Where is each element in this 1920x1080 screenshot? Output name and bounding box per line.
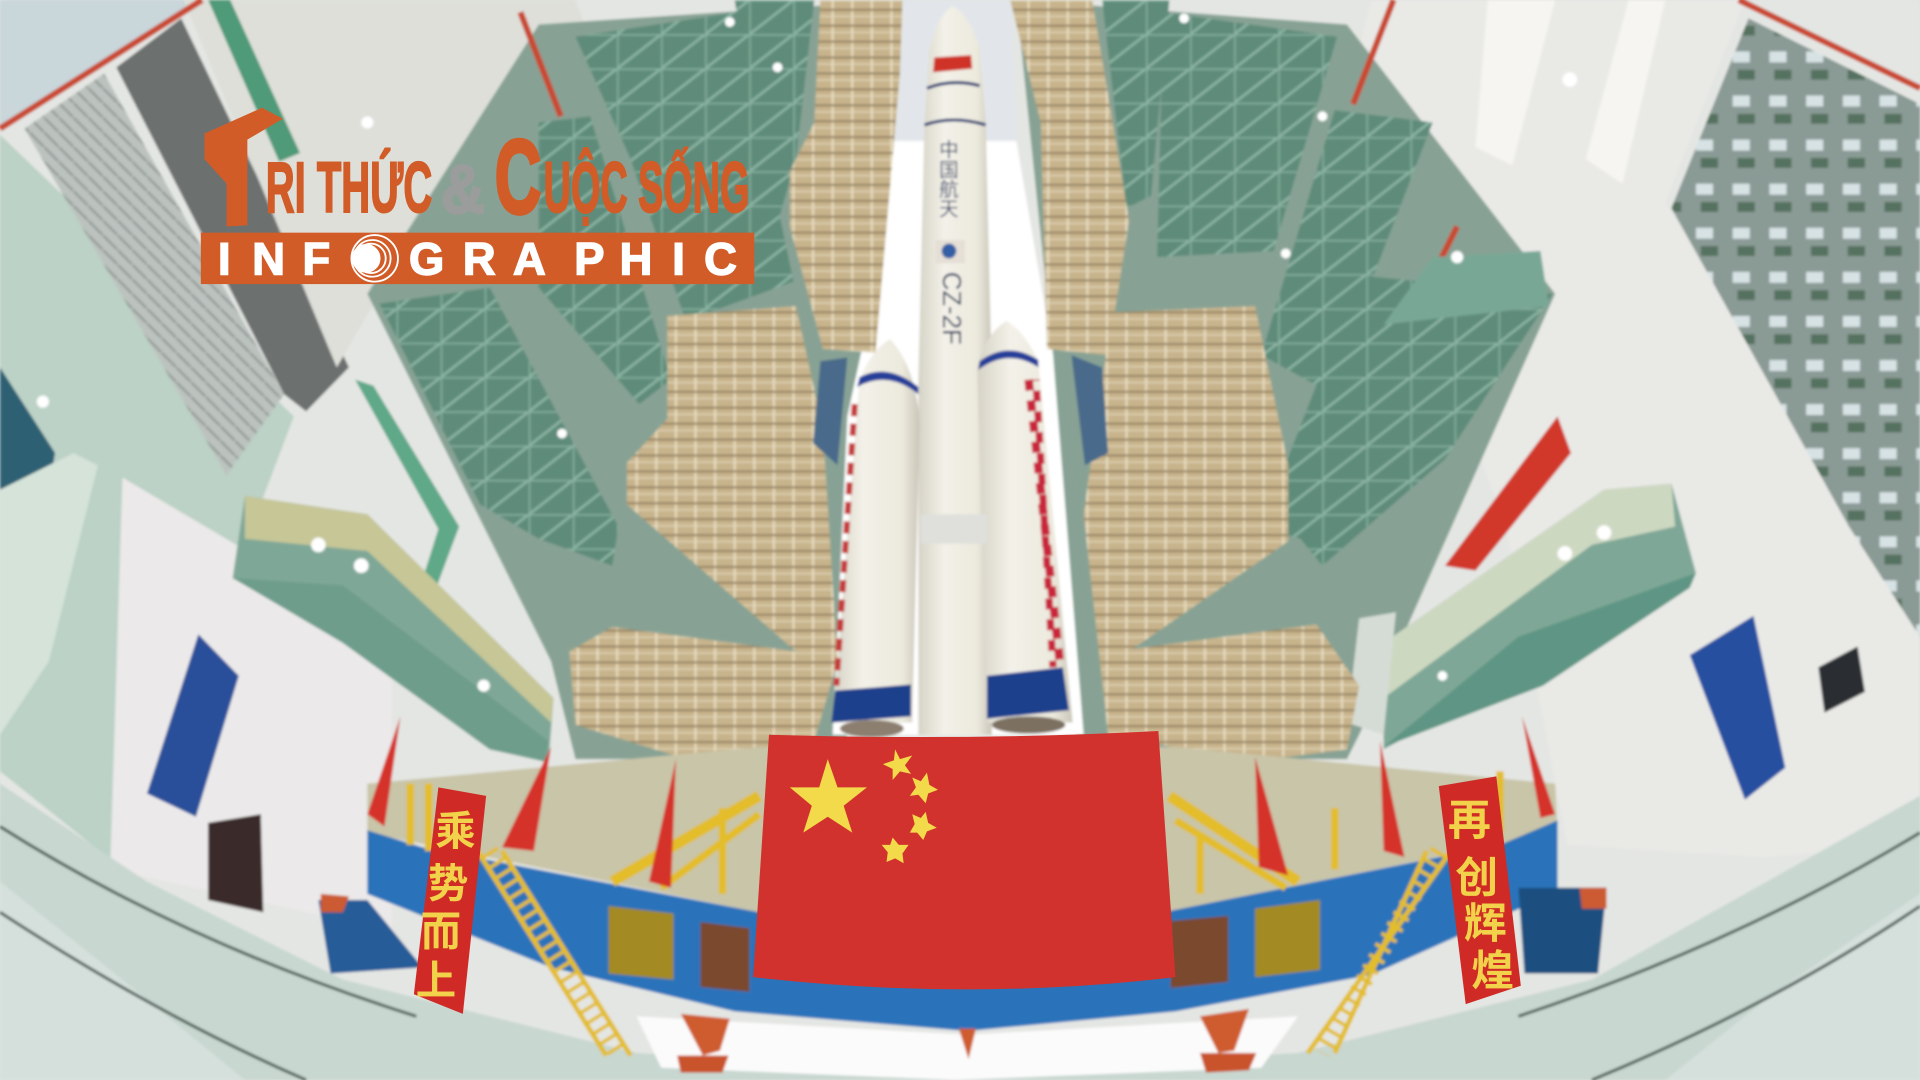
national flag (753, 731, 1176, 989)
top of hall behind rocket (879, 0, 1016, 141)
doorway (208, 814, 263, 912)
core lettering: 天 (939, 199, 959, 221)
yellow stairs and railings (410, 771, 1500, 1056)
blue shadow strips beside rocket (813, 355, 1108, 465)
dark wall screen (1818, 647, 1865, 713)
left booster (833, 339, 920, 722)
green gantry left (233, 0, 814, 762)
slogan banner right: 创 (1455, 855, 1498, 903)
infographic wordmark: INFGRAPHIC (218, 233, 737, 284)
slogan banner left: 上 (416, 957, 456, 1003)
core seam band (921, 514, 987, 544)
logo big C: C (495, 119, 541, 236)
booster blue bands (857, 372, 918, 394)
wall poster left (147, 634, 239, 817)
rocket (831, 6, 1073, 737)
platform bay windows (609, 906, 673, 980)
CZ-2F label: CZ-2F (937, 272, 965, 345)
slogan banner left (414, 787, 486, 1014)
infographic O icon (351, 235, 398, 282)
logo text: uộc sống: UỘC SỐNG (544, 148, 749, 228)
tan work platforms left (569, 0, 902, 774)
support feet (681, 1014, 730, 1056)
wall poster right (1690, 616, 1785, 800)
red payload marking (933, 55, 972, 72)
slogan banner right (1439, 776, 1521, 1004)
logo ampersand: & (441, 151, 485, 228)
central light opening (833, 141, 1084, 735)
green gantry right (1102, 0, 1696, 749)
slogan banner right: 煌 (1471, 948, 1514, 996)
logo: Tri thức & Cuộc sống Infographic (201, 108, 754, 284)
engine nozzles (840, 720, 904, 737)
small red flags (367, 716, 1555, 888)
flag stars (790, 749, 938, 863)
bright floor under platform (637, 1016, 1298, 1080)
decorative red trim lines (0, 0, 1920, 416)
core lettering: 国 (939, 159, 959, 181)
booster red checks (836, 404, 855, 686)
space logo (936, 240, 965, 263)
core dark bands (924, 83, 986, 125)
gantry underlay right (1016, 0, 1555, 759)
slogan banner left: 乘 (435, 808, 476, 854)
tan work platforms right (1010, 0, 1359, 762)
railing deck behind platform (367, 747, 1558, 912)
core lettering: 航 (939, 179, 959, 201)
slogan banner left: 而 (421, 908, 461, 954)
mobile launch platform blue base (318, 820, 1607, 1073)
infographic bar (201, 233, 754, 284)
logo text: ri thức: RI THỨC (266, 149, 432, 228)
logo big T (204, 108, 283, 227)
slogan banner left: 势 (428, 861, 468, 907)
red wall banner right (1445, 416, 1571, 571)
core stage (918, 6, 992, 735)
slogan banner right: 辉 (1464, 900, 1507, 948)
gantry underlay left (367, 0, 906, 759)
core lettering: 中 (939, 140, 959, 162)
ceiling lights (37, 13, 1611, 692)
floor arcs (0, 827, 1920, 1080)
right booster (977, 321, 1073, 722)
slogan banner right: 再 (1448, 797, 1491, 845)
